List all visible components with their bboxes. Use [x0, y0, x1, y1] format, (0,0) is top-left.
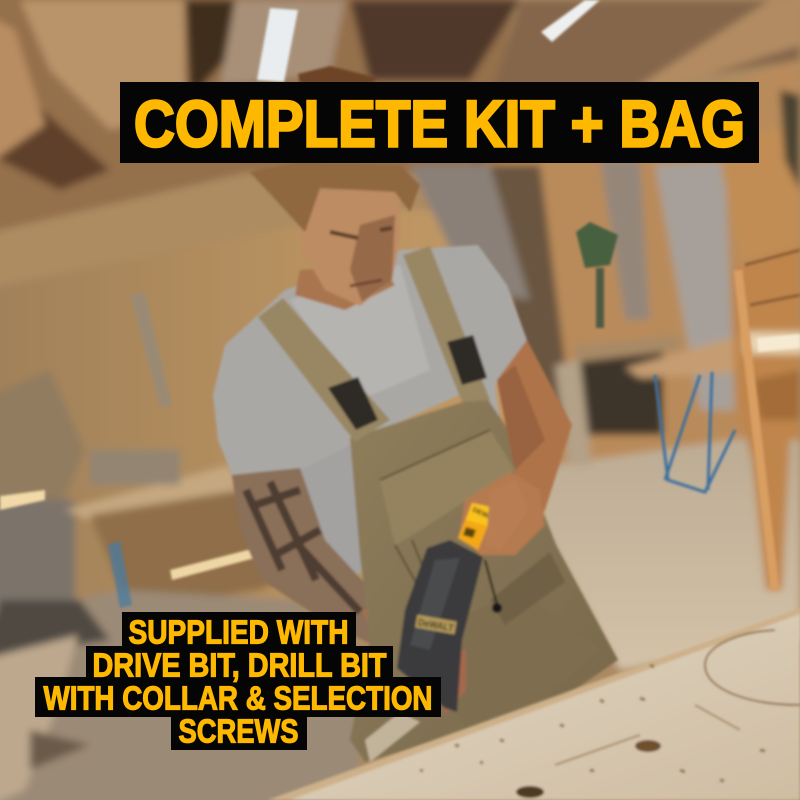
right hand [460, 472, 545, 555]
blue table legs [655, 372, 735, 492]
fingers over holder [486, 480, 528, 550]
left workshop clutter [0, 370, 360, 800]
neck [295, 265, 395, 310]
right cabinet and table [555, 335, 740, 465]
straps [258, 298, 390, 442]
heading banner [120, 82, 759, 163]
workbench [268, 608, 800, 800]
caption line 2: DRIVE BIT, DRILL BIT [92, 646, 386, 684]
overalls body [350, 395, 618, 762]
bag logo: DeWALT [417, 617, 454, 635]
right arm [497, 340, 572, 535]
bag [397, 540, 483, 712]
lower-left bench [0, 635, 78, 800]
photo: man in overalls [213, 66, 618, 762]
ceiling lights and details [0, 0, 800, 608]
lower hand [440, 650, 466, 715]
floor [520, 430, 800, 670]
blue bench end [108, 541, 132, 608]
wall tool [130, 292, 172, 408]
caption line 3: WITH COLLAR & SELECTION [44, 680, 432, 716]
caption line 1: SUPPLIED WITH [128, 614, 348, 650]
drawstring [485, 560, 497, 605]
left hand [362, 600, 412, 650]
tattooed arm [232, 468, 410, 650]
shirt [213, 245, 527, 590]
ceiling timber [0, 0, 800, 290]
right wall and window [410, 60, 800, 470]
caption line 4: SCREWS [178, 712, 298, 750]
left wall [0, 210, 520, 630]
timber frame lines [738, 270, 775, 590]
head [298, 190, 400, 306]
green machine [576, 222, 618, 268]
stacked timber [732, 245, 800, 590]
yellow bit holder: DEWALT [471, 506, 501, 525]
yellow bit holder [458, 503, 501, 550]
buckles [328, 377, 378, 430]
caption block [35, 612, 441, 750]
hair [250, 66, 420, 232]
